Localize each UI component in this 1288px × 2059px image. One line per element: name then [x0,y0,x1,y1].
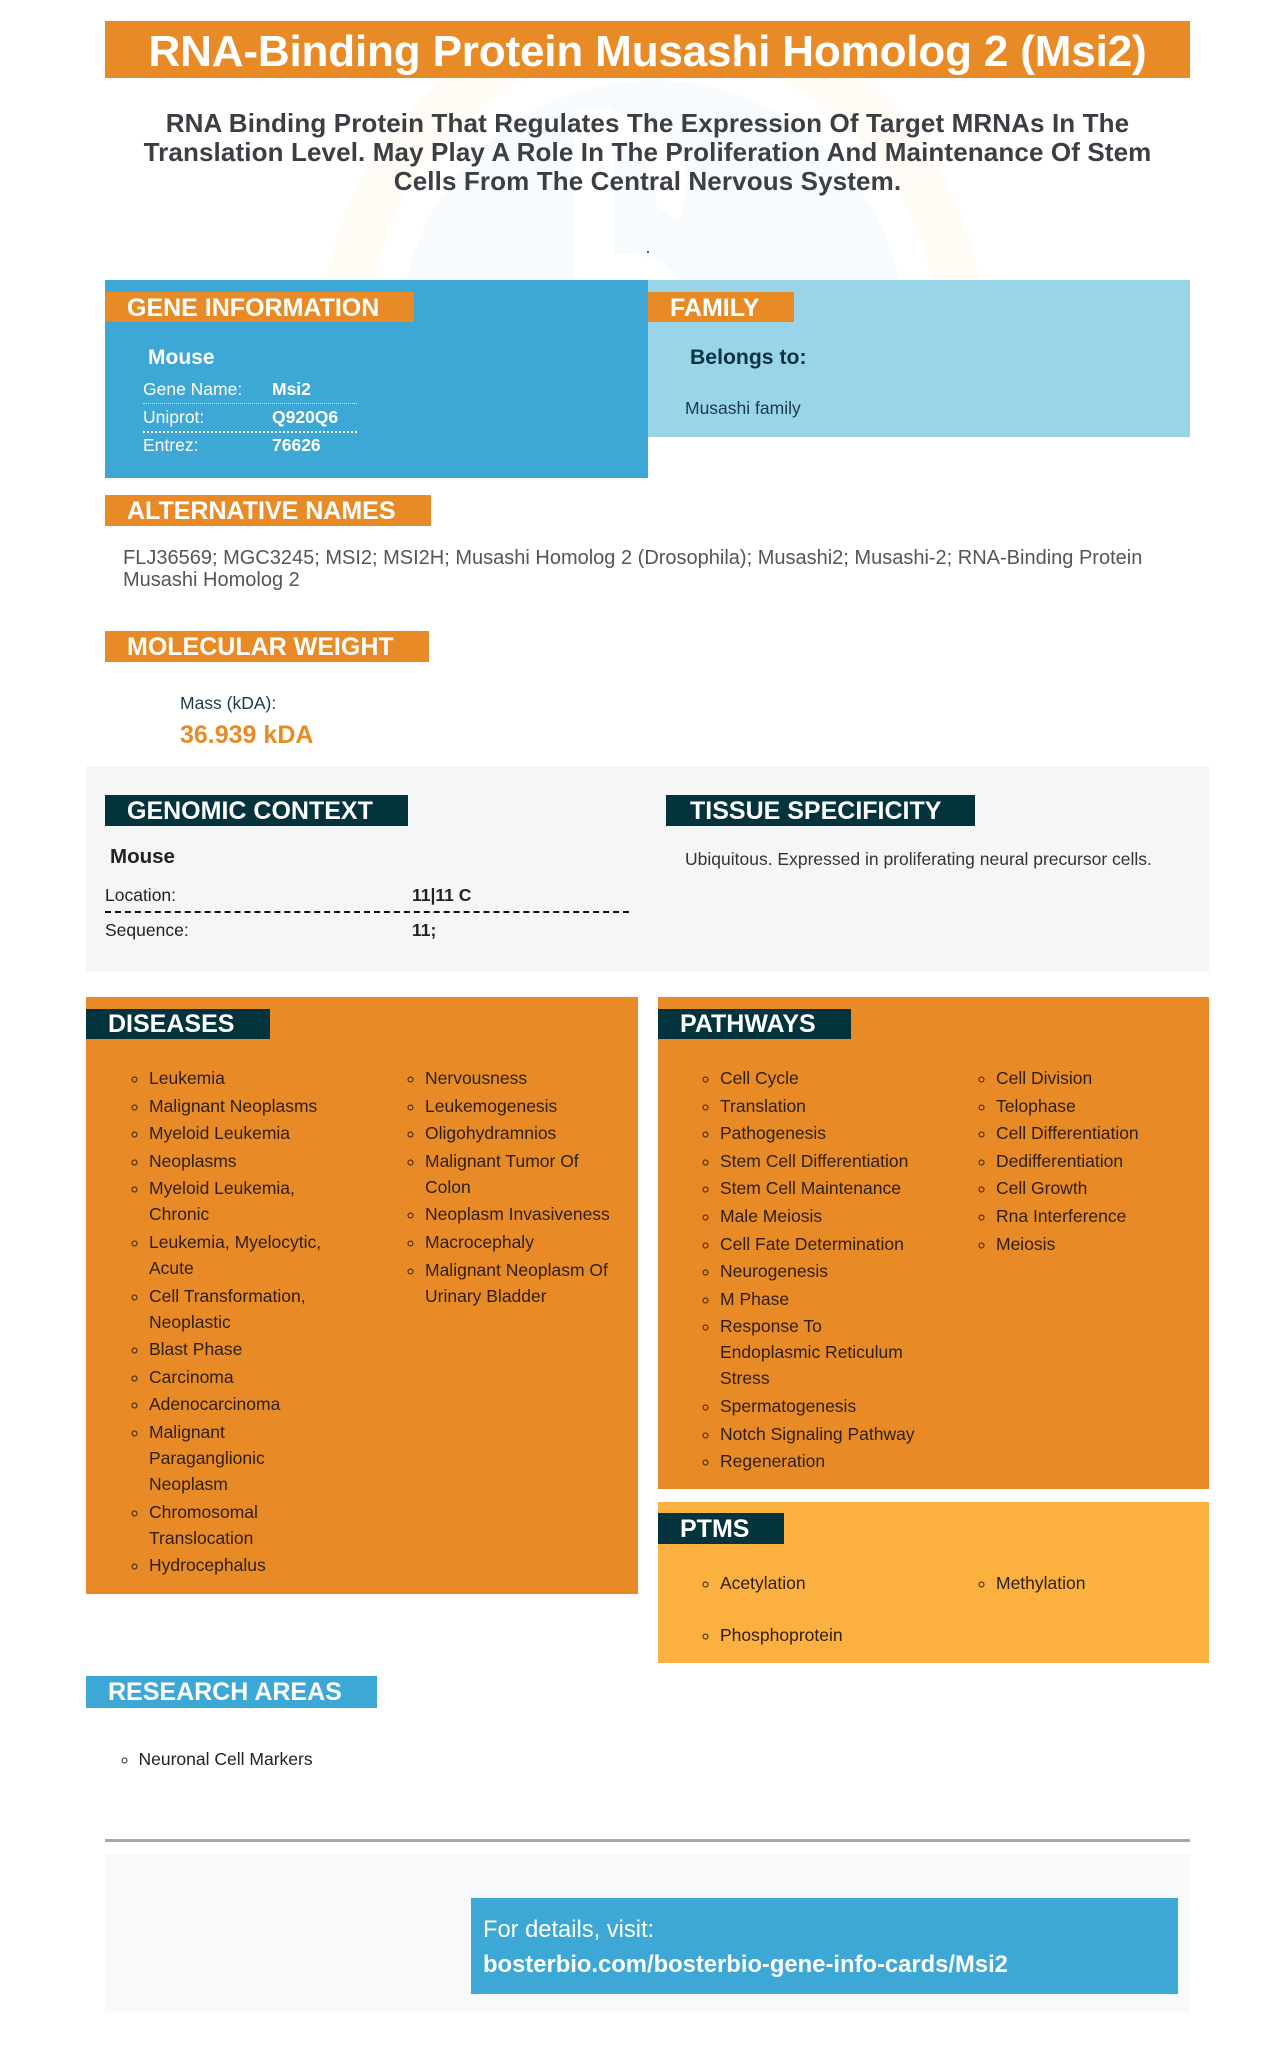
description: Cells From The Central Nervous System. [394,166,901,196]
entrez row: Entrez: [143,435,198,455]
ptms list column 2: Methylation [996,1573,1086,1593]
uniprot row: Uniprot: [143,407,204,427]
pathways list column 2: Dedifferentiation [996,1151,1123,1171]
heading: family: FAMILY [670,294,759,322]
tissue specificity text: Ubiquitous. Expressed in proliferating neural precursor cells. [685,849,1152,869]
heading: genomic context: GENOMIC CONTEXT [127,797,373,825]
diseases list column 2: Macrocephaly [425,1232,534,1252]
ptms list column 1: Acetylation [720,1573,806,1593]
description: Translation Level. May Play A Role In The Proliferation And Maintenance Of Stem [144,137,1151,167]
gene name row: Gene Name: [143,379,242,399]
ptms list column 1 [702,1573,843,1645]
pathways list column 1: M Phase [720,1289,789,1309]
diseases list column 1: Adenocarcinoma [149,1394,280,1414]
pathways list column 1: Male Meiosis [720,1206,822,1226]
entrez row [143,435,321,455]
pathways list column 1: Response To [720,1316,822,1336]
diseases list column 1: Chromosomal [149,1502,258,1522]
family name: Musashi family [685,398,801,418]
url: bosterbio.com/bosterbio-gene-info-cards/Msi2 [483,1951,1008,1978]
diseases list column 1: Leukemia, Myelocytic, [149,1232,321,1252]
diseases list column 2: Colon [425,1177,471,1197]
uniprot row [143,405,357,433]
alternative names text: Musashi Homolog 2 [123,568,300,590]
pathways list column 2: Cell Differentiation [996,1123,1139,1143]
pathways list column 1: Spermatogenesis [720,1396,856,1416]
diseases list column 1: Carcinoma [149,1367,234,1387]
heading: pathways [658,1009,851,1039]
diseases list column 1: Chronic [149,1204,209,1224]
pathways list column 1 [702,1068,915,1471]
research areas list: Neuronal Cell Markers [138,1749,313,1769]
pathways list column 1: Cell Fate Determination [720,1234,904,1254]
diseases list column 1: Translocation [149,1528,253,1548]
divider [105,1839,1190,1842]
diseases list column 2: Neoplasm Invasiveness [425,1204,610,1224]
pathways list column 1: Endoplasmic Reticulum [720,1342,903,1362]
location row: Location: [105,885,176,905]
pathways list column 1: Stress [720,1368,770,1388]
pathways list column 1: Stem Cell Differentiation [720,1151,908,1171]
title: RNA-Binding Protein Musashi Homolog 2 (Msi2) [148,27,1147,76]
callout: details link [471,1898,1178,1994]
description [144,108,1151,196]
pathways list column 1: Cell Cycle [720,1068,799,1088]
diseases list column 1: Blast Phase [149,1339,242,1359]
diseases list column 1: Acute [149,1258,194,1278]
alternative names text: FLJ36569; MGC3245; MSI2; MSI2H; Musashi Homolog 2 (Drosophila); Musashi2; Musashi-2; RNA-Binding Protein [123,546,1142,568]
diseases list column 1: Myeloid Leukemia [149,1123,290,1143]
diseases list column 1: Paraganglionic [149,1448,265,1468]
dot: . [646,238,650,257]
diseases list column 2: Urinary Bladder [425,1286,547,1306]
diseases list column 1: Neoplastic [149,1312,231,1332]
pathways list column 1: Notch Signaling Pathway [720,1424,915,1444]
diseases list column 1: Neoplasm [149,1474,228,1494]
heading: gene information: GENE INFORMATION [127,294,379,322]
diseases list column 1: Hydrocephalus [149,1555,266,1575]
heading: alternative names: ALTERNATIVE NAMES [127,497,396,525]
diseases list column 1 [132,1068,321,1575]
species: mouse: Mouse [148,346,215,369]
pathways list column 2: Cell Growth [996,1178,1087,1198]
heading: diseases [86,1009,270,1039]
pathways list column 2: Rna Interference [996,1206,1126,1226]
gene name row: Msi2 [272,379,311,399]
heading: ptms: PTMS [680,1515,749,1543]
diseases list column 2: Malignant Tumor Of [425,1151,579,1171]
ptms list column 1: Phosphoprotein [720,1625,843,1645]
diseases list column 2: Leukemogenesis [425,1096,557,1116]
pathways list column 2: Meiosis [996,1234,1055,1254]
diseases list column 2 [408,1068,610,1306]
diseases list column 2: Oligohydramnios [425,1123,556,1143]
diseases list column 1: Neoplasms [149,1151,237,1171]
diseases list column 1: Myeloid Leukemia, [149,1178,295,1198]
entrez row: 76626 [272,435,321,455]
diseases list column 1: Leukemia [149,1068,225,1088]
panel: genomic context and tissue specificity [86,766,1209,972]
pathways list column 2: Telophase [996,1096,1076,1116]
heading: molecular weight: MOLECULAR WEIGHT [127,633,394,661]
species: mouse: Mouse [110,845,175,868]
mass label: Mass (kDA): [180,693,276,713]
pathways list column 2: Cell Division [996,1068,1092,1088]
diseases list column 1: Malignant [149,1422,225,1442]
uniprot row: Q920Q6 [272,407,338,427]
heading: family [648,292,794,322]
panel: footer [105,1854,1190,2013]
sequence row: 11; [412,920,436,940]
panel: pathways [658,997,1209,1489]
pathways list column 1: Neurogenesis [720,1261,828,1281]
heading: diseases: DISEASES [108,1010,234,1038]
panel: diseases [86,997,638,1594]
watermark logo [328,78,978,280]
gene name row [143,377,357,404]
location row [105,883,629,913]
sequence row: Sequence: [105,920,189,940]
location row: 11|11 C [412,885,471,905]
diseases list column 2: Malignant Neoplasm Of [425,1260,608,1280]
heading: ptms [658,1513,784,1544]
description: RNA Binding Protein That Regulates The Expression Of Target MRNAs In The [166,108,1129,138]
heading: tissue specificity: TISSUE SPECIFICITY [690,797,941,825]
pathways list column 1: Regeneration [720,1451,825,1471]
alternative names text [123,546,1142,590]
panel: gene information [105,280,648,478]
pathways list column 1: Pathogenesis [720,1123,826,1143]
diseases list column 1: Cell Transformation, [149,1286,306,1306]
pathways list column 1: Stem Cell Maintenance [720,1178,901,1198]
pathways list column 2 [978,1068,1139,1254]
heading: research areas: RESEARCH AREAS [108,1678,342,1706]
call to action: For details, visit: [483,1917,654,1943]
panel: ptms [658,1502,1209,1663]
panel: family [648,280,1190,437]
mass value: 36.939 kDA [180,721,313,749]
sequence row [105,920,436,940]
belongs to: Belongs to: [690,346,807,369]
diseases list column 2: Nervousness [425,1068,527,1088]
pathways list column 1: Translation [720,1096,806,1116]
heading: pathways: PATHWAYS [680,1010,816,1038]
diseases list column 1: Malignant Neoplasms [149,1096,317,1116]
